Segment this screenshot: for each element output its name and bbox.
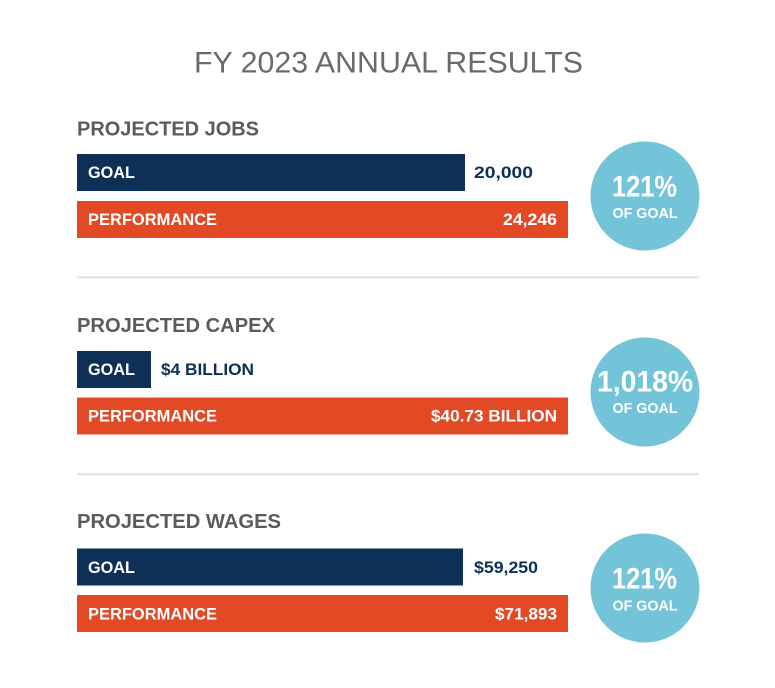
heading: projected wages: PROJECTED WAGES <box>77 511 281 533</box>
panel: projected capex <box>77 315 700 446</box>
performance bar: capex <box>77 398 568 434</box>
callout: wages percent of goal: 121% <box>612 562 677 596</box>
callout: jobs percent of goal: 121% <box>612 170 677 204</box>
heading: projected jobs: PROJECTED JOBS <box>77 118 259 140</box>
goal bar: capex: GOAL <box>88 360 135 379</box>
callout: wages percent of goal <box>590 534 700 642</box>
callout: jobs percent of goal <box>590 142 700 250</box>
callout: capex percent of goal <box>590 338 700 446</box>
goal value: capex: $4 BILLION <box>161 360 254 379</box>
goal bar: wages <box>77 548 463 586</box>
performance bar: jobs: 24,246 <box>503 210 557 229</box>
performance bar: wages <box>77 595 568 632</box>
goal bar: wages: GOAL <box>88 558 135 577</box>
panel: projected jobs <box>77 118 700 250</box>
goal value: wages: $59,250 <box>474 558 538 577</box>
callout: capex percent of goal: 1,018% <box>597 366 693 398</box>
performance bar: jobs: PERFORMANCE <box>88 210 217 229</box>
goal bar: capex <box>77 351 151 388</box>
panel: projected wages <box>77 511 700 642</box>
goal bar: jobs <box>77 154 465 191</box>
performance bar: capex: PERFORMANCE <box>88 406 217 426</box>
performance bar: wages: $71,893 <box>495 604 557 624</box>
heading: projected capex: PROJECTED CAPEX <box>77 315 276 337</box>
performance bar: capex: $40.73 BILLION <box>431 406 557 426</box>
callout: jobs percent of goal: OF GOAL <box>612 205 678 222</box>
goal value: jobs: 20,000 <box>474 163 533 182</box>
title: FY 2023 ANNUAL RESULTS <box>194 46 583 80</box>
callout: wages percent of goal: OF GOAL <box>612 598 678 614</box>
goal bar: jobs: GOAL <box>88 163 135 182</box>
performance bar: wages: PERFORMANCE <box>88 604 217 624</box>
callout: capex percent of goal: OF GOAL <box>612 400 678 417</box>
performance bar: jobs <box>77 201 568 238</box>
